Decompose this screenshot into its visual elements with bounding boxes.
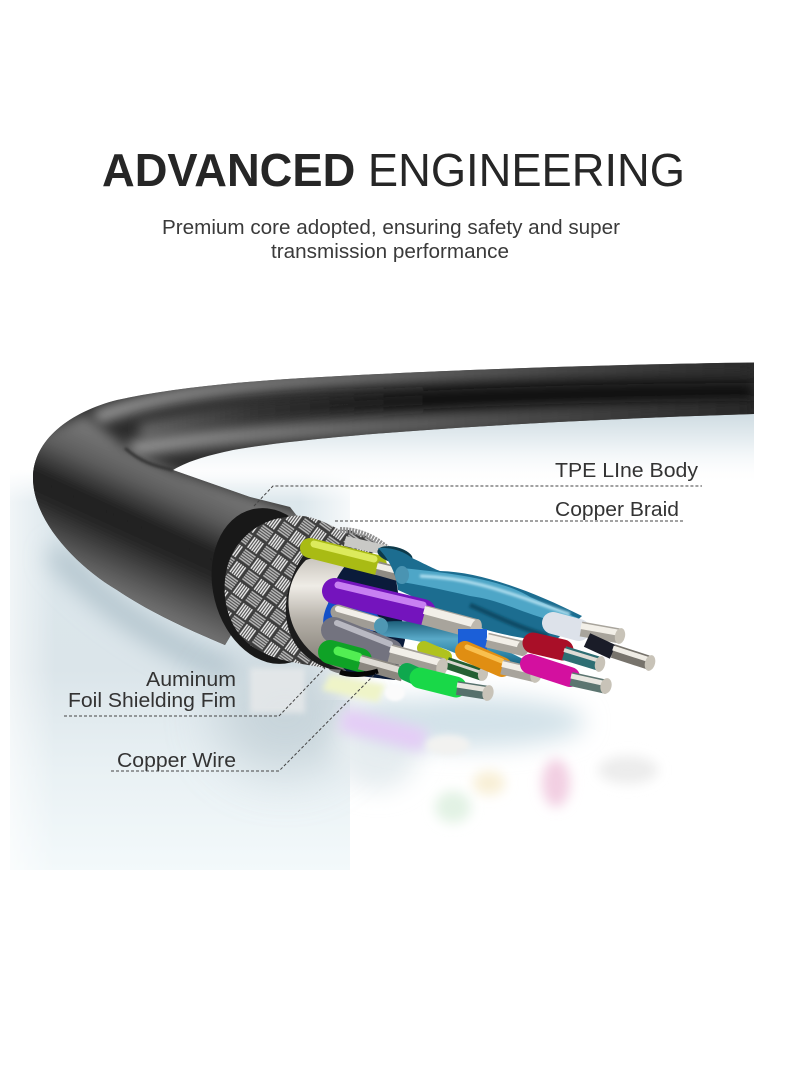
wire: silver pointed [338, 609, 388, 634]
subtitle [162, 217, 620, 263]
wire: red [533, 643, 607, 673]
wire: silver upper [345, 541, 385, 550]
cable end ring [196, 495, 346, 677]
aluminium foil shield [286, 552, 348, 670]
wire: twisted blue pair with white tip [376, 543, 627, 645]
dark inner core [327, 566, 405, 680]
subtitle: Premium core adopted, ensuring safety and super [162, 217, 620, 239]
subtitle: transmission performance [271, 241, 509, 263]
label: Copper Braid: Copper Braid [555, 499, 679, 521]
wire: small green [424, 648, 490, 682]
wire: yellow [310, 544, 402, 575]
wire: purple [335, 585, 484, 640]
title: ADVANCED ENGINEERING [102, 144, 685, 196]
wire: bright green [407, 672, 495, 702]
backdrop shading and reflection [10, 414, 754, 870]
label: TPE Line Body [254, 460, 702, 506]
copper braid [224, 516, 390, 674]
wire: teal sheath cluster [380, 621, 525, 672]
wire: black [587, 640, 657, 672]
label: Aluminum Foil Shielding Film: Foil Shielding Fim [68, 690, 236, 712]
label: Aluminum Foil Shielding Film: Auminum [146, 669, 236, 691]
label: Copper Wire [111, 673, 376, 772]
cable jacket [20, 362, 754, 670]
wire: green left [330, 651, 403, 675]
wire: grey [334, 623, 450, 677]
wire: orange [465, 647, 543, 684]
label: Aluminum Foil Shielding Film [64, 668, 325, 716]
wire: magenta [530, 664, 613, 695]
wire: royal blue base [323, 600, 385, 648]
label: Copper Wire: Copper Wire [117, 750, 236, 772]
wire: blue with silver conductor [458, 637, 531, 657]
label: TPE Line Body: TPE LIne Body [555, 460, 698, 482]
cable illustration [10, 362, 754, 870]
